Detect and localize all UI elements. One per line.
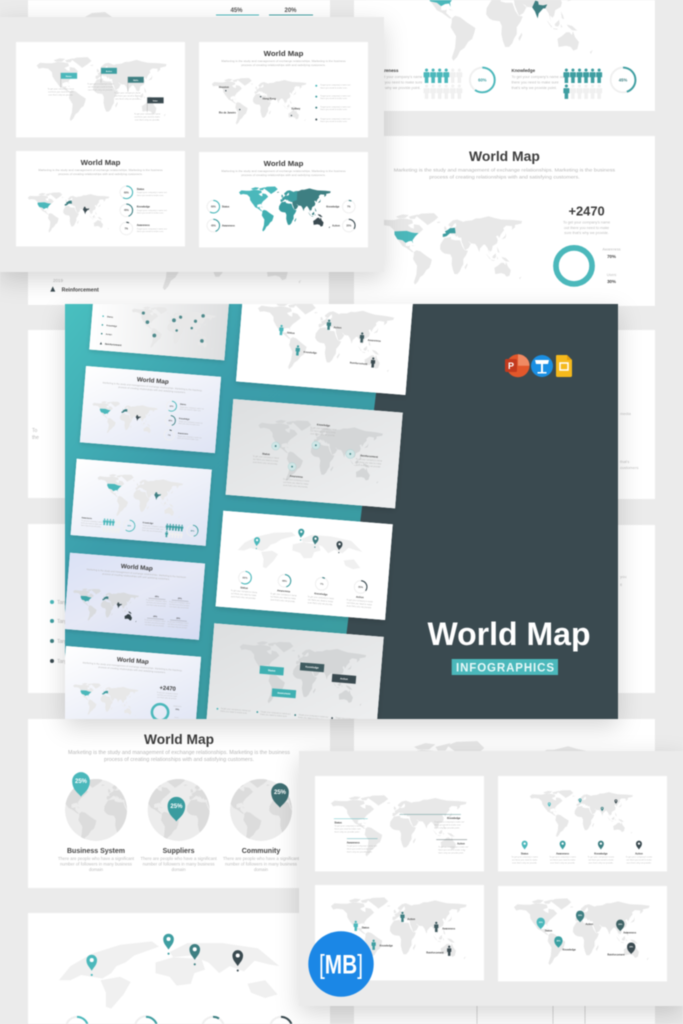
slide: coloured continents: [199, 152, 368, 247]
background slide strip: right column lower: it: [620, 582, 623, 587]
globes intro text: [68, 750, 291, 763]
background slide: left column, reinforcement legend: [28, 135, 329, 305]
icon: PowerPoint: P: [508, 361, 514, 371]
globes intro text: Marketing is the study and management of exchange relationships. Marketing is the business: [68, 750, 291, 756]
background slide: top right, USA and India with people stats: [354, 0, 655, 111]
globe: suppliers: number of followers in many business: [143, 862, 215, 866]
background slide strip: left column upper: the: [32, 435, 39, 441]
globe: business system: There are people who have a significant: [58, 856, 135, 861]
hero title: World Map: [428, 616, 590, 652]
background slide strip: right column upper: media: [620, 411, 632, 416]
background slide: top left, stats: 20%: [284, 8, 297, 14]
globe: business system: number of followers in many business: [60, 862, 132, 866]
globe: business system: [44, 772, 182, 872]
logo: MB badge: [308, 931, 374, 997]
arc map with four pins: [59, 934, 279, 1009]
slide: three percent rings: [16, 151, 185, 246]
icon: PowerPoint: [505, 354, 530, 377]
slide: world map with three globes: [28, 719, 347, 888]
globe: suppliers: [127, 776, 265, 872]
hero slide: USA and India stats: [71, 459, 212, 546]
background slide: top left, stats: 45%: [230, 8, 243, 14]
background slide: left column, reinforcement legend: 2019: [53, 278, 64, 283]
background slide strip: right column upper: that's: [620, 459, 629, 464]
globes heading: World Map: [144, 731, 214, 747]
slide: people on map: [315, 885, 484, 980]
hero badge: infographics: [452, 659, 558, 675]
lower collage background: [299, 751, 683, 1006]
hero slide: four column stats: [64, 553, 205, 640]
panel: upper slide collage: [0, 17, 384, 272]
background slide strip: left column lower with bullet list: Targ: [57, 619, 67, 625]
background slide: top left, stats: [28, 0, 330, 110]
globe: community: [209, 776, 347, 872]
hero slide: people on map: [236, 304, 414, 396]
background slide strip: left column upper: [28, 330, 330, 498]
icon: Keynote: [531, 355, 553, 377]
panel: lower slide collage: [299, 751, 683, 1006]
background slide strip: right column lower: you: [620, 574, 626, 579]
slide: pins row on map: [498, 776, 667, 871]
globe: community: number of followers in many business: [225, 862, 297, 866]
globe: business system: Business System: [67, 848, 125, 855]
hero teal background: [65, 304, 395, 719]
upper collage background: [0, 17, 384, 272]
globe: business system: 25%: [75, 779, 88, 785]
slide: lines on map: [315, 776, 484, 871]
globe: suppliers: 25%: [170, 804, 183, 810]
globe: business system: domain: [89, 867, 104, 872]
background slide strip: left column lower with bullet list: Targ: [57, 659, 67, 665]
globe: community: Community: [242, 848, 280, 855]
hero dark background: [346, 392, 396, 720]
globes intro text: process of creating relationships with and satisfying customers.: [104, 757, 254, 763]
slide: percent pins on map: [498, 886, 667, 981]
background slide strip: left column lower with bullet list: [28, 524, 330, 693]
background slide strip: right column upper: [354, 330, 655, 499]
globe: community: There are people who have a significant: [223, 856, 300, 861]
background slide strip: right column lower: [354, 525, 655, 693]
hero slide: +2470: [64, 646, 200, 720]
background slide strip: left column lower with bullet list: Targ: [57, 600, 67, 606]
background slide: bottom right: [354, 862, 655, 1024]
globe: suppliers: There are people who have a significant: [140, 856, 218, 861]
hero slide: radar circles on map: [226, 399, 403, 508]
hero slide: dots legend map: [88, 304, 229, 360]
globe: community: 25%: [274, 790, 287, 796]
background slide strip: left column upper: To: [32, 428, 38, 434]
hero panel: [64, 303, 414, 720]
hero slide: three percent rings: [80, 366, 221, 453]
background slide: right column behind lower panel: [354, 719, 655, 889]
globe: community: domain: [254, 867, 269, 872]
background slide strip: left column lower with bullet list: Targ: [57, 639, 67, 645]
hero slide: tags on map: [207, 624, 384, 720]
partial percent rings at page edge: [67, 1016, 291, 1024]
slide: named cities on map: [199, 42, 368, 137]
hero badge: infographics: INFOGRAPHICS: [456, 662, 554, 674]
slide: flags on map: [16, 42, 185, 137]
background slide: right column, +2470: [354, 136, 655, 306]
icon: Google Slides: [556, 355, 572, 377]
globe: suppliers: Suppliers: [163, 848, 195, 855]
background slide: bottom left arc map with pins: [28, 913, 330, 1024]
logo: MB badge: [MB]: [319, 950, 363, 980]
hero slide: arc map with pins: [216, 511, 393, 620]
globe: suppliers: domain: [172, 867, 186, 872]
background slide strip: right column upper: customers: [620, 465, 638, 470]
